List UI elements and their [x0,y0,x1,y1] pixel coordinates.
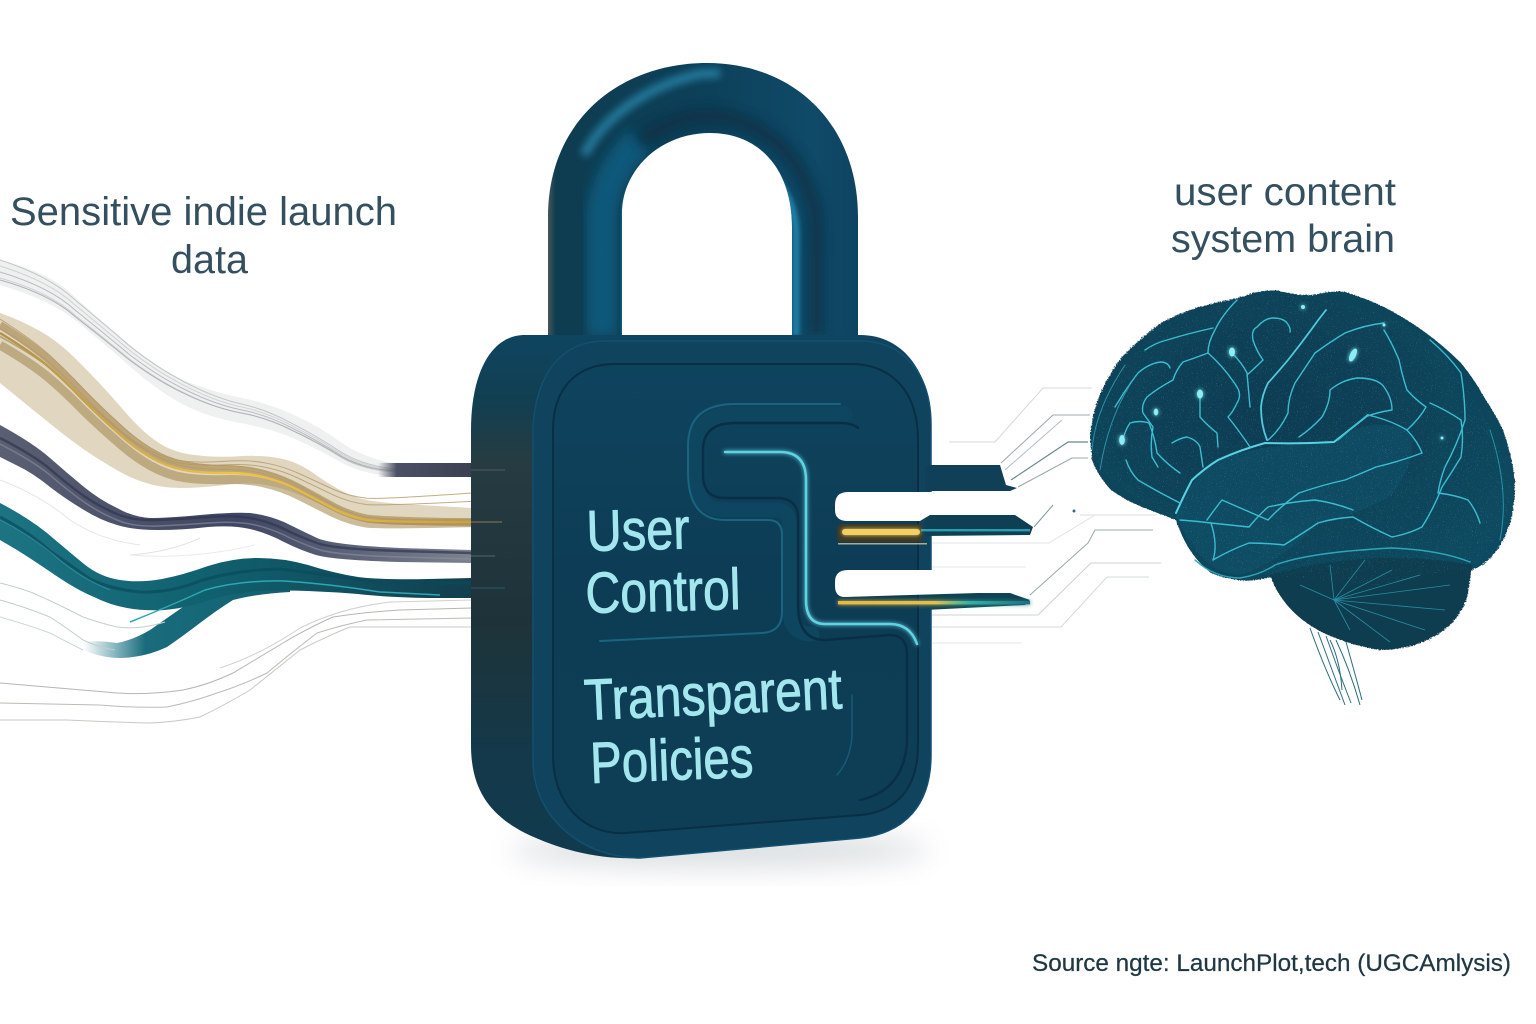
label: user content system brain: user content [1174,171,1396,214]
label: sensitive indie launch data: Sensitive indie launch [10,190,397,234]
lock text: transparent policies: Policies [589,725,754,796]
lock text: user control: Control [585,557,741,626]
strand: teal [0,503,472,658]
lock body side [471,335,931,858]
cerebrum [1090,290,1515,590]
lock shadow [510,832,930,868]
brain stem fibres [1310,628,1362,705]
brain sulci [1092,300,1503,578]
strand: slate [0,425,472,563]
cerebellum [1270,558,1472,650]
temporal lobe tone [1176,425,1412,575]
label: user content system brain [1171,171,1396,261]
padlock [471,63,1033,858]
brain glow nodes [1119,305,1444,445]
brain speckle texture [1092,292,1512,586]
lock text: transparent policies [583,656,843,796]
source note: Source ngte: LaunchPlot,tech (UGCAmlysis) [1032,950,1511,977]
lock text: transparent policies: Transparent [583,656,843,733]
brain [1090,290,1515,705]
strand: pale gray [0,260,472,479]
gold connector lines [842,529,920,535]
connector bars and slots [835,465,1033,610]
data strands flowing into lock [0,260,472,723]
cerebellum fibres [1300,560,1450,642]
lock body front [533,341,931,858]
label: sensitive indie launch data: data [171,238,249,282]
label: sensitive indie launch data [10,190,397,282]
circuit traces to brain [932,388,1161,643]
shackle [548,63,858,336]
inner panel [553,364,918,833]
strand: gold [0,304,472,534]
circuit channel [600,404,917,800]
label: user content system brain: system brain [1171,218,1395,261]
strand: pale lines [0,480,472,723]
lock text: user control: User [586,496,690,564]
lock text: user control [585,496,741,626]
left-side strand entry marks [471,470,505,588]
